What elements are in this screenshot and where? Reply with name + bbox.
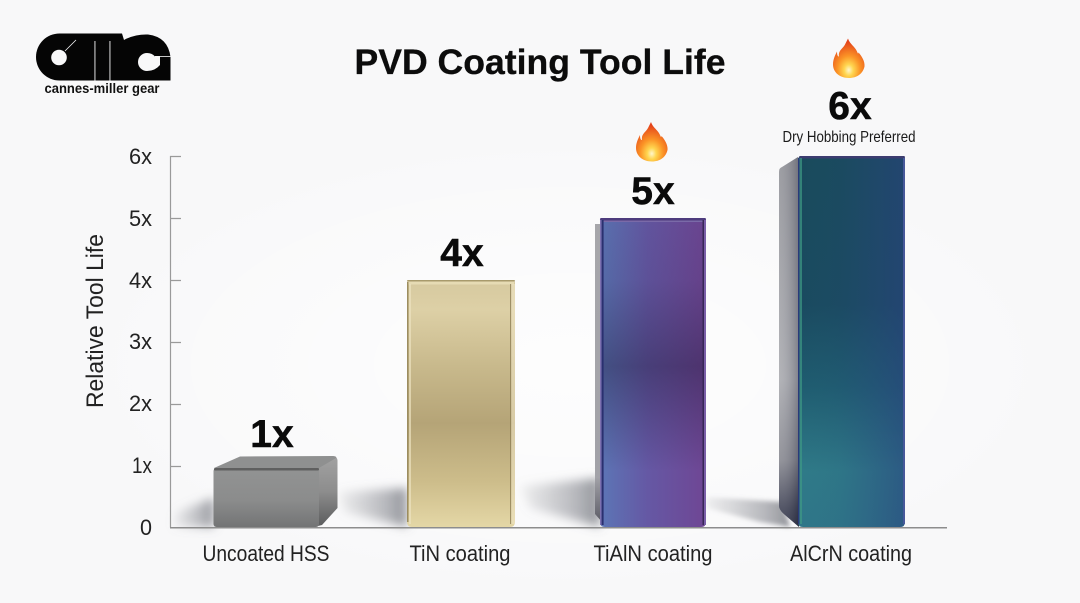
infographic canvas <box>36 34 947 566</box>
icon: flame above TiAlN <box>636 122 668 162</box>
x axis baseline <box>170 527 947 528</box>
category label: Uncoated HSS: Uncoated HSS <box>202 541 330 566</box>
bar: TiAlN coating <box>595 218 706 527</box>
logo wordmark: cannes-miller gear <box>44 81 160 96</box>
axis tick labels: 1x <box>132 453 152 478</box>
annotation: Dry Hobbing Preferred: Dry Hobbing Preferred <box>782 129 916 146</box>
axis tick labels: 2x <box>129 391 152 416</box>
value label: 5x: 5x <box>631 170 675 213</box>
title: PVD Coating Tool Life <box>354 42 726 82</box>
category label: AlCrN coating: AlCrN coating <box>790 541 912 566</box>
bar: AlCrN coating <box>779 156 905 527</box>
logo mark <box>36 34 171 81</box>
axis line and ticks <box>170 156 181 528</box>
category label: TiN coating: TiN coating <box>410 541 510 566</box>
bar: Uncoated HSS <box>214 456 338 527</box>
axis tick labels: 3x <box>129 329 152 354</box>
axis tick labels: 5x <box>129 206 152 231</box>
axis tick labels: 4x <box>129 268 152 293</box>
logo: cannes-miller gear <box>36 34 171 96</box>
value label: 6x: 6x <box>828 85 872 128</box>
axis tick labels <box>129 144 152 540</box>
floor shadows <box>174 478 790 527</box>
bar: TiN coating <box>407 280 515 527</box>
category label: TiAlN coating: TiAlN coating <box>594 541 712 566</box>
axis title: Relative Tool Life <box>82 234 109 408</box>
value label: 4x: 4x <box>440 232 484 275</box>
axis tick labels: 6x <box>129 144 152 169</box>
y axis <box>82 144 181 540</box>
value label: 1x: 1x <box>250 413 294 456</box>
icon: flame above AlCrN <box>833 38 865 78</box>
axis tick labels: 0 <box>140 515 152 540</box>
background glow <box>70 130 1070 600</box>
